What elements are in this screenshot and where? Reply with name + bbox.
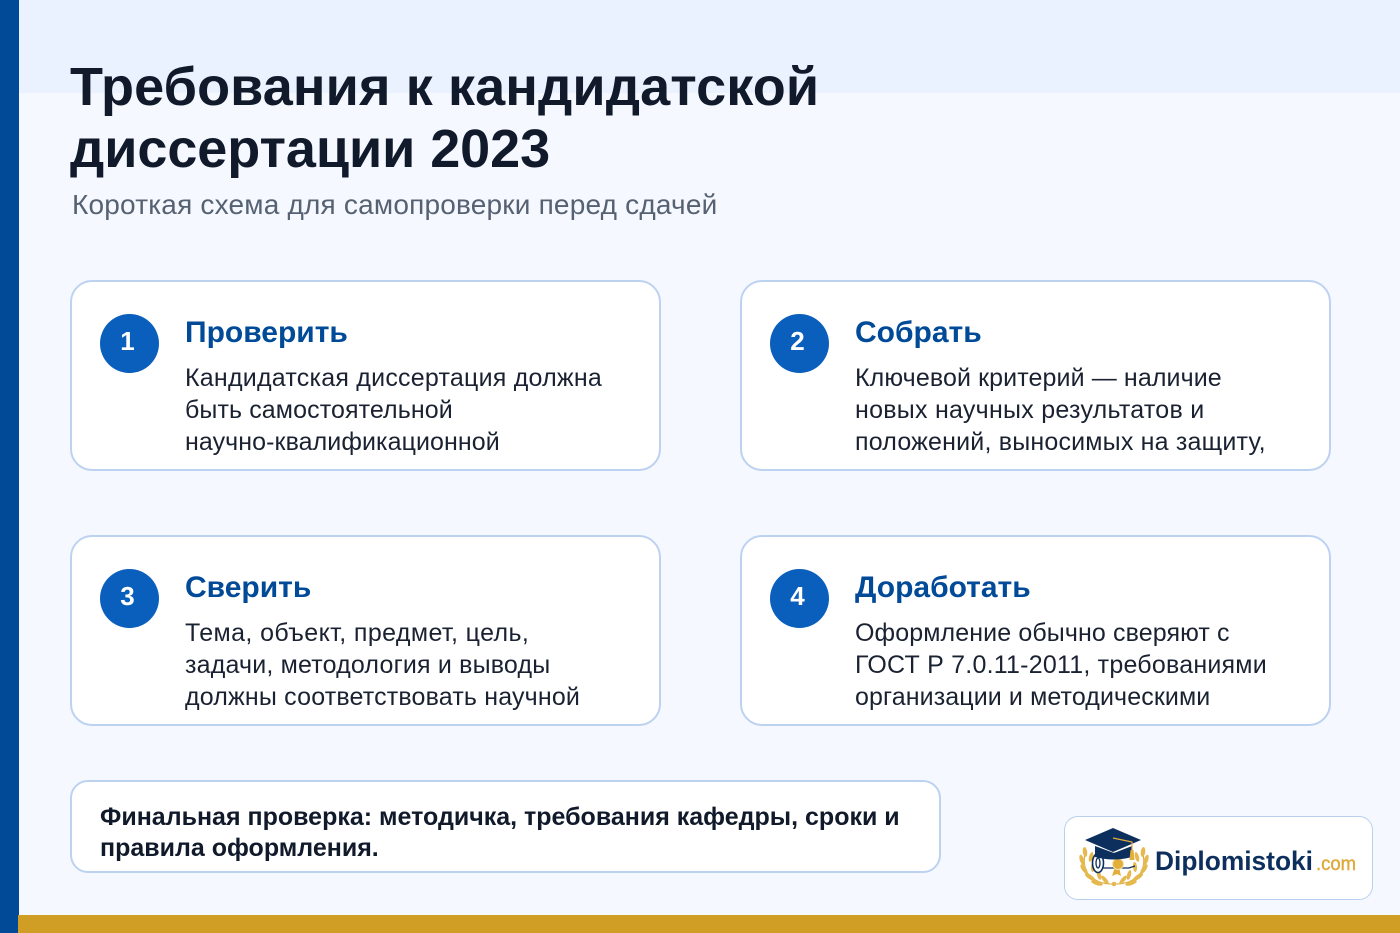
icon: laurel wreath [1078,847,1150,887]
title [70,57,819,179]
logo [1079,828,1356,886]
final check text: правила оформления. [100,834,379,862]
step 1 text: быть самостоятельной [185,396,453,424]
icon: graduation cap [1085,828,1141,860]
logo domain: .com [1316,854,1356,875]
step number 1: 1 [120,326,135,356]
panel: step 3 [70,535,661,726]
final check text: Финальная проверка: методичка, требования кафедры, сроки и [100,803,900,831]
bottom accent bar [18,915,1400,933]
panel: step 4 [740,535,1331,726]
step 3 text: задачи, методология и выводы [185,651,550,679]
step 4 text: ГОСТ Р 7.0.11-2011, требованиями [855,651,1267,679]
step number 1 [100,314,159,373]
step number 4: 4 [790,581,805,611]
step number 4 [770,569,829,628]
step 2 text: новых научных результатов и [855,396,1204,424]
step 2 text [855,364,1266,456]
step 2 text: положений, выносимых на защиту, [855,428,1266,456]
step 1 text [185,364,602,456]
step number 2: 2 [790,326,805,356]
logo wordmark: Diplomistoki [1155,846,1313,876]
step 3 text: должны соответствовать научной [185,683,580,711]
step 3 text: Тема, объект, предмет, цель, [185,619,529,647]
step 4 heading: Доработать [855,571,1031,604]
logo panel [1064,816,1373,900]
title: диссертации 2023 [70,119,550,179]
step number 2 [770,314,829,373]
final check text [100,803,900,862]
top band [18,0,1400,93]
step 3 text [185,619,580,711]
icon: diploma scroll [1092,852,1135,876]
step 4 text: организации и методическими [855,683,1210,711]
step 2 heading: Собрать [855,316,982,349]
panel: step 1 [70,280,661,471]
subtitle: Короткая схема для самопроверки перед сдачей [72,189,717,220]
step 1 text: научно-квалификационной [185,428,500,456]
step 4 text: Оформление обычно сверяют с [855,619,1230,647]
step 4 text [855,619,1267,711]
step 2 text: Ключевой критерий — наличие [855,364,1222,392]
panel: step 2 [740,280,1331,471]
step 1 text: Кандидатская диссертация должна [185,364,602,392]
callout: final check [70,780,941,873]
step 3 heading: Сверить [185,571,311,604]
title: Требования к кандидатской [70,57,819,117]
left accent bar [0,0,19,933]
step 1 heading: Проверить [185,316,348,349]
step number 3 [100,569,159,628]
step number 3: 3 [120,581,135,611]
